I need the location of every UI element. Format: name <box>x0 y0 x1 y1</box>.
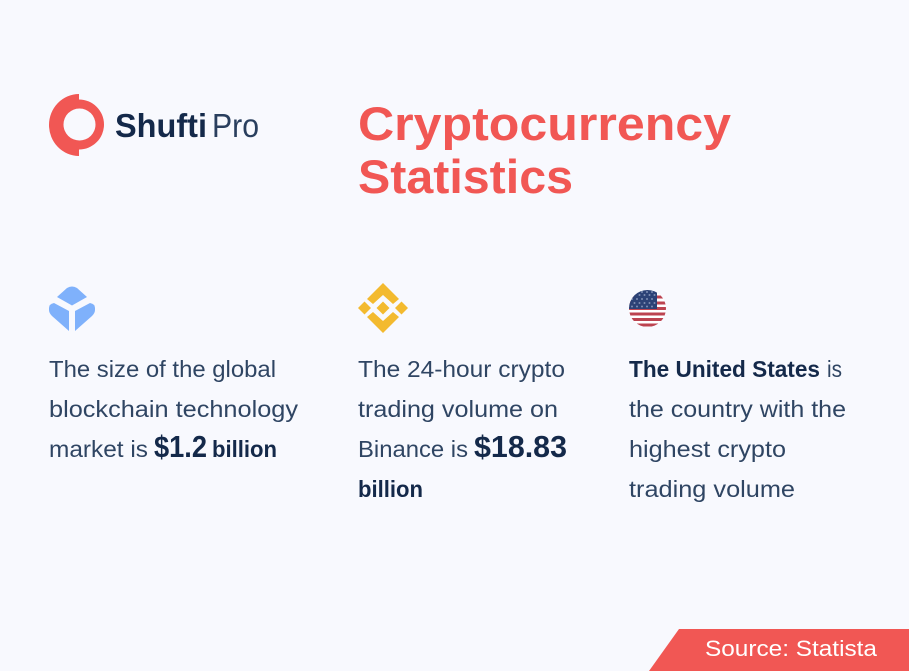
text: blockchain market size: market is <box>49 436 148 462</box>
logo wordmark: Pro <box>212 107 259 144</box>
text: blockchain market size: $1.2 <box>154 429 207 464</box>
text: United States highest volume: the country with the <box>629 396 846 422</box>
title: Cryptocurrency <box>358 97 731 150</box>
source banner: Source: Statista <box>705 636 878 661</box>
title: Statistics <box>358 150 573 203</box>
text: Binance trading volume: $18.83 <box>474 429 567 464</box>
text: blockchain market size: blockchain technology <box>49 396 299 422</box>
panel: Binance volume <box>358 283 567 502</box>
logo wordmark <box>115 107 259 144</box>
text: Binance trading volume: trading volume on <box>358 396 558 422</box>
icon: logo ring <box>49 94 104 156</box>
icon: Blockchain cube <box>49 286 95 331</box>
title <box>358 97 731 203</box>
text: United States highest volume <box>629 356 846 502</box>
icon: Binance diamond <box>358 283 408 333</box>
logo wordmark: Shufti <box>115 107 207 144</box>
text: Binance trading volume: billion <box>358 476 423 502</box>
panel: United States <box>628 289 846 502</box>
text: blockchain market size <box>49 356 299 464</box>
panel: blockchain market <box>49 286 299 464</box>
text: United States highest volume: trading volume <box>629 476 795 502</box>
source banner <box>649 629 909 671</box>
icon: US flag circle <box>629 290 666 326</box>
text: blockchain market size: The size of the global <box>49 356 276 382</box>
text: Binance trading volume: The 24-hour crypto <box>358 356 565 382</box>
text: United States highest volume: highest crypto <box>629 436 786 462</box>
text: Binance trading volume: Binance is <box>358 436 468 462</box>
logo: Shufti Pro <box>49 94 259 156</box>
text: United States highest volume: The United States <box>629 356 820 382</box>
text: blockchain market size: billion <box>212 436 277 462</box>
text: Binance trading volume <box>358 356 567 502</box>
text: United States highest volume: is <box>827 356 842 382</box>
